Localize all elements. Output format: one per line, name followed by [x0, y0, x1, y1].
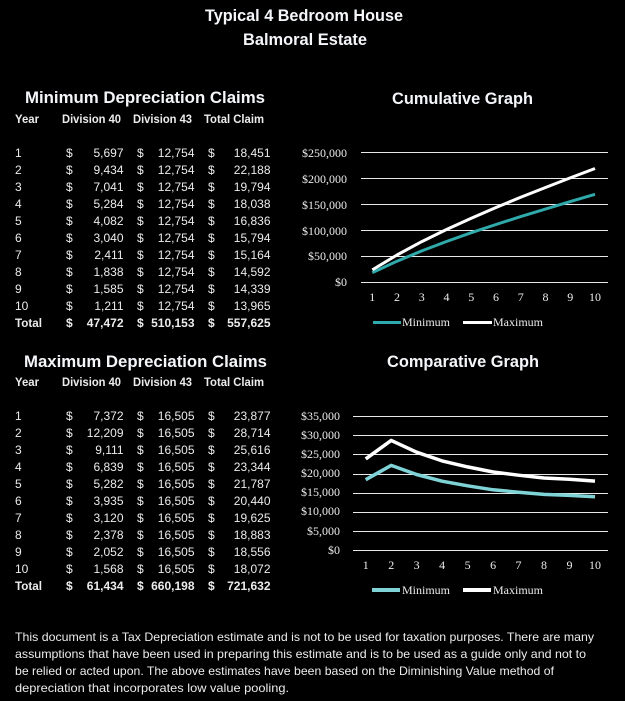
y axis labels: $0 [335, 275, 347, 289]
table rows: $ [66, 426, 73, 440]
disclaimer text block: depreciation that incorporates low value pooling. [15, 681, 289, 695]
x axis labels: 4 [439, 558, 445, 572]
table rows: $ [137, 409, 144, 423]
table rows: 5 [15, 214, 22, 228]
table total row: 721,632 [227, 579, 271, 593]
table rows: 12,754 [158, 180, 195, 194]
x axis labels: 8 [542, 290, 548, 304]
y axis labels: $20,000 [301, 466, 340, 480]
title: Balmoral Estate [243, 30, 367, 49]
table rows: 28,714 [234, 426, 271, 440]
table rows: $ [208, 511, 215, 525]
table rows: 18,072 [234, 562, 271, 576]
table rows: $ [208, 443, 215, 457]
table rows: $ [137, 248, 144, 262]
table rows: 25,616 [234, 443, 271, 457]
table rows: 18,556 [234, 545, 271, 559]
table rows: $ [208, 528, 215, 542]
x axis labels: 9 [567, 290, 573, 304]
table rows: 3,120 [93, 511, 124, 525]
table rows: 2,411 [94, 248, 124, 262]
table rows: 19,625 [234, 511, 271, 525]
table rows: 14,592 [234, 265, 271, 279]
table rows: 10 [15, 299, 29, 313]
legend [372, 583, 544, 597]
table rows: $ [137, 443, 144, 457]
table rows: $ [137, 231, 144, 245]
table rows: $ [66, 146, 73, 160]
table rows: 23,344 [234, 460, 271, 474]
table total row: $ [137, 579, 144, 593]
table total row: $ [66, 316, 73, 330]
table rows: 16,505 [158, 426, 195, 440]
table rows: 1 [15, 146, 22, 160]
table rows: 1,585 [93, 282, 124, 296]
table header row [15, 112, 264, 126]
table rows: $ [137, 511, 144, 525]
table rows: $ [66, 477, 73, 491]
table rows: $ [137, 477, 144, 491]
table rows: 9 [15, 545, 22, 559]
y axis labels [301, 409, 340, 557]
table rows [15, 409, 271, 576]
table rows: $ [208, 545, 215, 559]
table rows: 15,164 [234, 248, 271, 262]
table rows: 18,451 [234, 146, 271, 160]
table rows: 16,505 [158, 460, 195, 474]
table total row: 660,198 [151, 579, 195, 593]
y axis labels: $150,000 [302, 198, 347, 212]
x axis labels: 5 [468, 290, 474, 304]
table rows: 10 [15, 562, 29, 576]
x axis labels: 3 [419, 290, 425, 304]
table rows: $ [208, 231, 215, 245]
legend: Maximum [493, 315, 544, 329]
table rows: $ [137, 265, 144, 279]
table rows: 16,505 [158, 409, 195, 423]
table rows: 4,082 [93, 214, 124, 228]
table total row: 61,434 [87, 579, 124, 593]
table rows: $ [208, 197, 215, 211]
legend [373, 315, 544, 329]
table rows: 7 [15, 248, 22, 262]
table rows: 18,883 [234, 528, 271, 542]
x axis labels: 8 [541, 558, 547, 572]
table total row: Total [15, 316, 42, 330]
table rows: 7,041 [93, 180, 124, 194]
table rows: 21,787 [234, 477, 271, 491]
table rows: $ [66, 562, 73, 576]
table rows: $ [137, 562, 144, 576]
table rows: 12,754 [158, 248, 195, 262]
table rows: $ [66, 409, 73, 423]
x axis labels: 4 [444, 290, 450, 304]
x axis labels: 1 [369, 290, 375, 304]
disclaimer text block: be relied or acted upon. The above estimates have been based on the Diminishing Value method of [15, 664, 555, 678]
table rows: 16,505 [158, 511, 195, 525]
line: annual maximum [366, 440, 595, 481]
table header row: Division 40 [62, 375, 121, 389]
table rows: 16,505 [158, 562, 195, 576]
table rows: 16,505 [158, 528, 195, 542]
table total row: $ [137, 316, 144, 330]
disclaimer text block: This document is a Tax Depreciation estimate and is not to be used for taxation purposes. There are many [15, 630, 594, 644]
table rows: 16,505 [158, 443, 195, 457]
table rows: $ [66, 282, 73, 296]
table rows: 3 [15, 443, 22, 457]
table rows: $ [137, 146, 144, 160]
table rows: $ [208, 146, 215, 160]
table rows: 12,754 [158, 282, 195, 296]
table rows: 12,754 [158, 146, 195, 160]
table rows: 7,372 [93, 409, 124, 423]
x axis labels: 7 [516, 558, 522, 572]
table rows: 12,754 [158, 214, 195, 228]
table rows: 12,209 [87, 426, 124, 440]
y axis labels: $50,000 [308, 249, 347, 263]
table total row: Total [15, 579, 42, 593]
table rows: 7 [15, 511, 22, 525]
table total row [15, 316, 271, 330]
table rows: 5,284 [93, 197, 124, 211]
table header row: Total Claim [204, 375, 264, 389]
line: cumulative minimum [372, 194, 595, 273]
panel: maximum depreciation claims table [15, 352, 271, 593]
table rows: 9,111 [95, 443, 124, 457]
title [205, 6, 403, 49]
x axis labels [363, 558, 601, 572]
y axis labels: $35,000 [301, 409, 340, 423]
table rows: 2 [15, 426, 22, 440]
table rows: $ [208, 494, 215, 508]
table total row: $ [66, 579, 73, 593]
table rows: $ [66, 511, 73, 525]
table rows: 12,754 [158, 163, 195, 177]
legend: Minimum [402, 583, 451, 597]
disclaimer text block: assumptions that have been used in preparing this estimate and is to be used as a guide only and not to [15, 647, 586, 661]
x axis labels: 10 [589, 558, 601, 572]
panel: minimum depreciation claims table [15, 88, 271, 330]
table rows: $ [66, 265, 73, 279]
table rows: $ [66, 460, 73, 474]
table header row: Year [15, 375, 39, 389]
table rows: 16,836 [234, 214, 271, 228]
heading: minimum depreciation claims: Minimum Depreciation Claims [25, 88, 265, 107]
table rows: 4 [15, 460, 22, 474]
table rows: 1,568 [93, 562, 124, 576]
y axis labels: $5,000 [307, 524, 340, 538]
table rows: $ [137, 197, 144, 211]
y axis labels: $25,000 [301, 447, 340, 461]
x axis labels: 6 [490, 558, 496, 572]
table rows: 23,877 [234, 409, 271, 423]
table rows: 1,838 [93, 265, 124, 279]
title: Typical 4 Bedroom House [205, 6, 403, 25]
table header row [15, 375, 264, 389]
x axis labels: 10 [589, 290, 601, 304]
y axis labels: $10,000 [301, 504, 340, 518]
table rows: 19,794 [234, 180, 271, 194]
table rows: $ [208, 282, 215, 296]
table header row: Division 43 [133, 375, 192, 389]
table rows: 16,505 [158, 545, 195, 559]
table rows: 15,794 [234, 231, 271, 245]
table rows: $ [66, 163, 73, 177]
y axis labels: $15,000 [301, 485, 340, 499]
table rows: 5 [15, 477, 22, 491]
table total row: 557,625 [227, 316, 271, 330]
table rows: 22,188 [234, 163, 271, 177]
table rows: 4 [15, 197, 22, 211]
table header row: Year [15, 112, 39, 126]
table rows: $ [208, 460, 215, 474]
table total row: $ [208, 579, 215, 593]
table rows: 9 [15, 282, 22, 296]
table rows: 9,434 [93, 163, 124, 177]
panel: comparative graph [301, 352, 608, 597]
table rows: 12,754 [158, 197, 195, 211]
table rows: $ [137, 460, 144, 474]
table rows: $ [137, 282, 144, 296]
table rows: $ [66, 494, 73, 508]
x axis labels: 9 [566, 558, 572, 572]
table rows: $ [208, 265, 215, 279]
table rows: $ [137, 180, 144, 194]
table rows: $ [208, 562, 215, 576]
y axis labels: $100,000 [302, 224, 347, 238]
table rows: 6 [15, 231, 22, 245]
panel: cumulative graph [302, 89, 608, 329]
y axis labels: $250,000 [302, 146, 347, 160]
table rows: 6 [15, 494, 22, 508]
table rows: 1,211 [94, 299, 124, 313]
legend: Minimum [402, 315, 451, 329]
table rows: 3 [15, 180, 22, 194]
y axis labels: $30,000 [301, 428, 340, 442]
table rows: $ [137, 528, 144, 542]
x axis labels: 7 [518, 290, 524, 304]
table rows: $ [137, 494, 144, 508]
x axis labels: 2 [388, 558, 394, 572]
heading: comparative graph: Comparative Graph [387, 352, 539, 371]
table rows: 8 [15, 528, 22, 542]
table rows: $ [208, 180, 215, 194]
table rows: $ [66, 180, 73, 194]
y axis labels: $200,000 [302, 172, 347, 186]
table total row: 47,472 [87, 316, 124, 330]
table rows: $ [66, 545, 73, 559]
table rows: $ [208, 299, 215, 313]
table rows: 20,440 [234, 494, 271, 508]
disclaimer text block [15, 630, 594, 695]
table rows: 2,052 [93, 545, 124, 559]
x axis labels: 2 [394, 290, 400, 304]
table rows: $ [137, 299, 144, 313]
heading: cumulative graph: Cumulative Graph [392, 89, 533, 108]
x axis labels: 5 [465, 558, 471, 572]
table rows: 13,965 [234, 299, 271, 313]
table rows: $ [137, 214, 144, 228]
line: cumulative maximum [372, 168, 595, 270]
table rows: 6,839 [93, 460, 124, 474]
table rows: $ [66, 299, 73, 313]
table rows: 2 [15, 163, 22, 177]
table rows: $ [137, 426, 144, 440]
table rows: $ [208, 426, 215, 440]
table rows: 8 [15, 265, 22, 279]
table header row: Division 43 [133, 112, 192, 126]
table rows: $ [137, 163, 144, 177]
x axis labels: 6 [493, 290, 499, 304]
table rows: $ [208, 477, 215, 491]
table header row: Total Claim [204, 112, 264, 126]
table rows: 2,378 [93, 528, 124, 542]
table rows: $ [208, 163, 215, 177]
table rows: 16,505 [158, 477, 195, 491]
y axis labels [302, 146, 347, 289]
line: annual minimum [366, 465, 595, 497]
table rows: 12,754 [158, 299, 195, 313]
x axis labels [369, 290, 601, 304]
table total row: $ [208, 316, 215, 330]
table rows: $ [66, 231, 73, 245]
table rows: 12,754 [158, 265, 195, 279]
table rows: $ [66, 528, 73, 542]
x axis labels: 3 [414, 558, 420, 572]
table rows: $ [208, 409, 215, 423]
table rows: $ [66, 443, 73, 457]
table rows: 3,935 [93, 494, 124, 508]
table rows: $ [208, 248, 215, 262]
table rows: 1 [15, 409, 22, 423]
x axis labels: 1 [363, 558, 369, 572]
table total row [15, 579, 271, 593]
table total row: 510,153 [151, 316, 195, 330]
table rows: $ [208, 214, 215, 228]
table rows: 16,505 [158, 494, 195, 508]
y axis labels: $0 [328, 543, 340, 557]
table rows: 18,038 [234, 197, 271, 211]
table rows: 14,339 [234, 282, 271, 296]
heading: maximum depreciation claims: Maximum Depreciation Claims [24, 352, 267, 371]
table rows [15, 146, 271, 313]
table rows: $ [66, 214, 73, 228]
table rows: 12,754 [158, 231, 195, 245]
table rows: $ [66, 197, 73, 211]
legend: Maximum [493, 583, 544, 597]
table rows: 3,040 [93, 231, 124, 245]
table rows: $ [66, 248, 73, 262]
table rows: $ [137, 545, 144, 559]
table rows: 5,697 [93, 146, 124, 160]
table header row: Division 40 [62, 112, 121, 126]
table rows: 5,282 [93, 477, 124, 491]
